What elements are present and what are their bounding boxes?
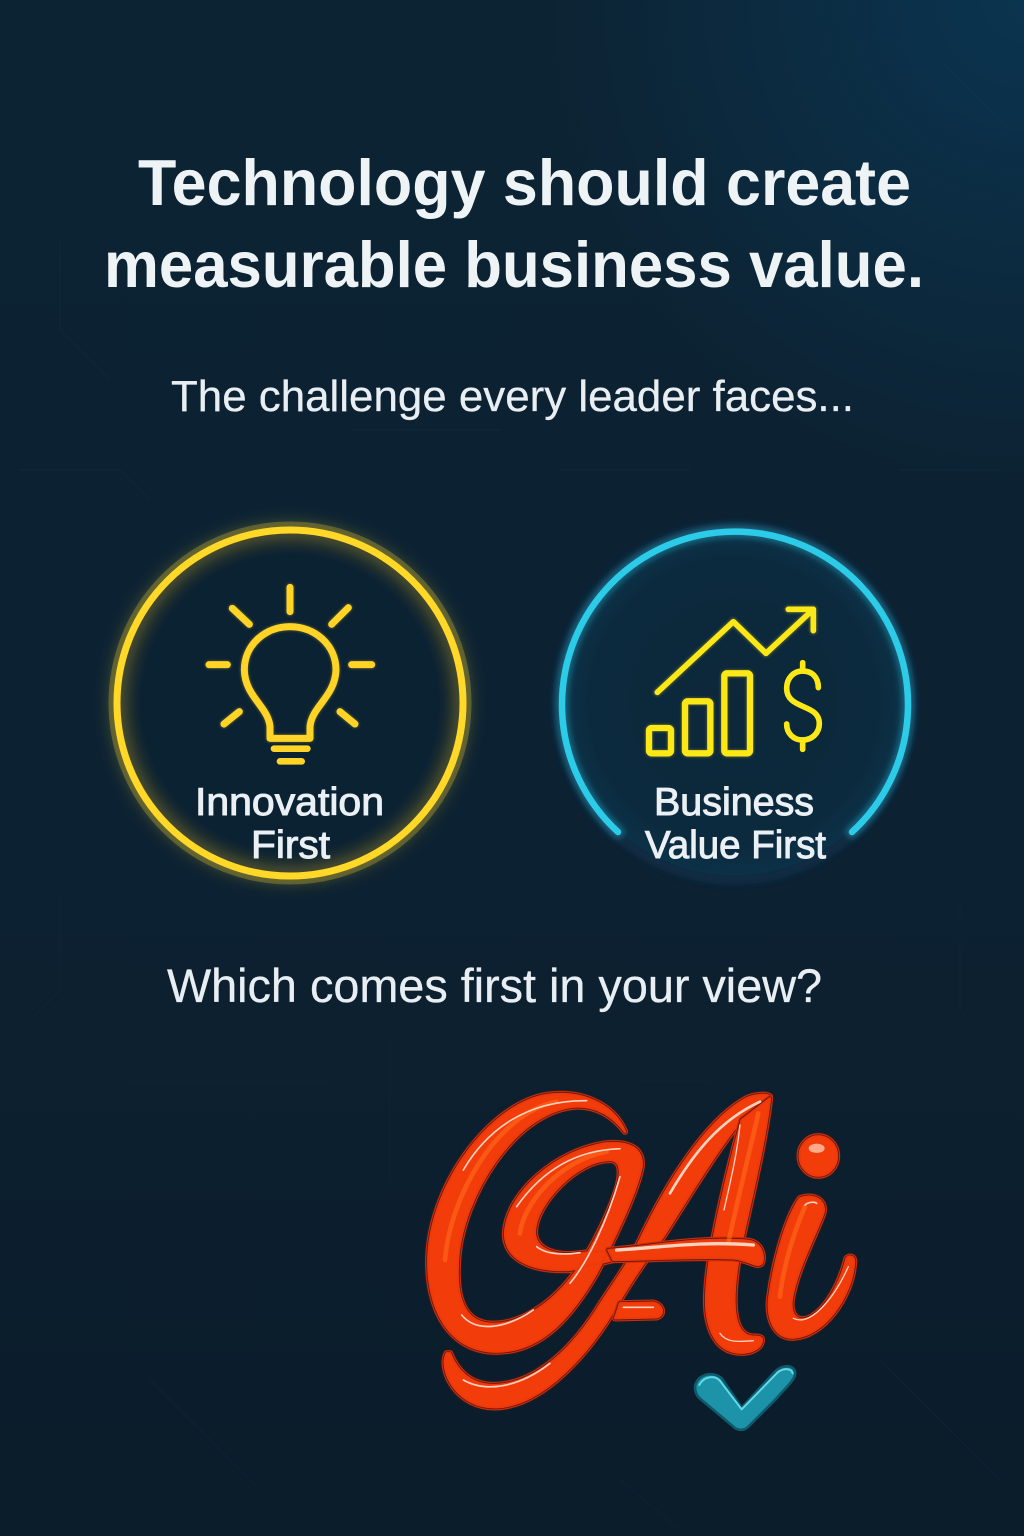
panel: innovation first — [112, 525, 468, 881]
label: business value first: Business — [654, 781, 814, 824]
subtitle: The challenge every leader faces... — [171, 372, 854, 421]
letter i dot — [800, 1136, 837, 1176]
icon: light bulb — [209, 587, 372, 761]
letter stroke: looping C — [428, 1094, 642, 1352]
crossbar — [608, 1240, 763, 1265]
letter stroke: tail and left leg of A — [445, 1095, 770, 1407]
logo: neon script Ai — [428, 1094, 854, 1430]
label: business value first: Value First — [645, 824, 826, 867]
title: measurable business value. — [104, 228, 924, 301]
letter i stem — [769, 1197, 854, 1338]
letter stroke: right leg of A — [706, 1098, 770, 1353]
label: innovation first: Innovation — [195, 781, 384, 824]
panel: business value first — [552, 521, 916, 885]
label: business value first — [645, 781, 826, 867]
bars — [649, 673, 750, 753]
icon: growth chart with dollar sign — [649, 609, 819, 753]
inner orange shading — [445, 1102, 805, 1297]
highlights — [462, 1101, 848, 1387]
icon: teal checkmark — [695, 1366, 795, 1430]
title: Technology should create — [138, 146, 911, 219]
dot highlight — [809, 1144, 825, 1153]
short bar — [615, 1303, 662, 1318]
question: Which comes first in your view? — [167, 959, 822, 1012]
title — [104, 146, 924, 301]
label: innovation first: First — [251, 824, 330, 867]
label: innovation first — [195, 781, 384, 867]
dollar sign — [787, 663, 819, 749]
